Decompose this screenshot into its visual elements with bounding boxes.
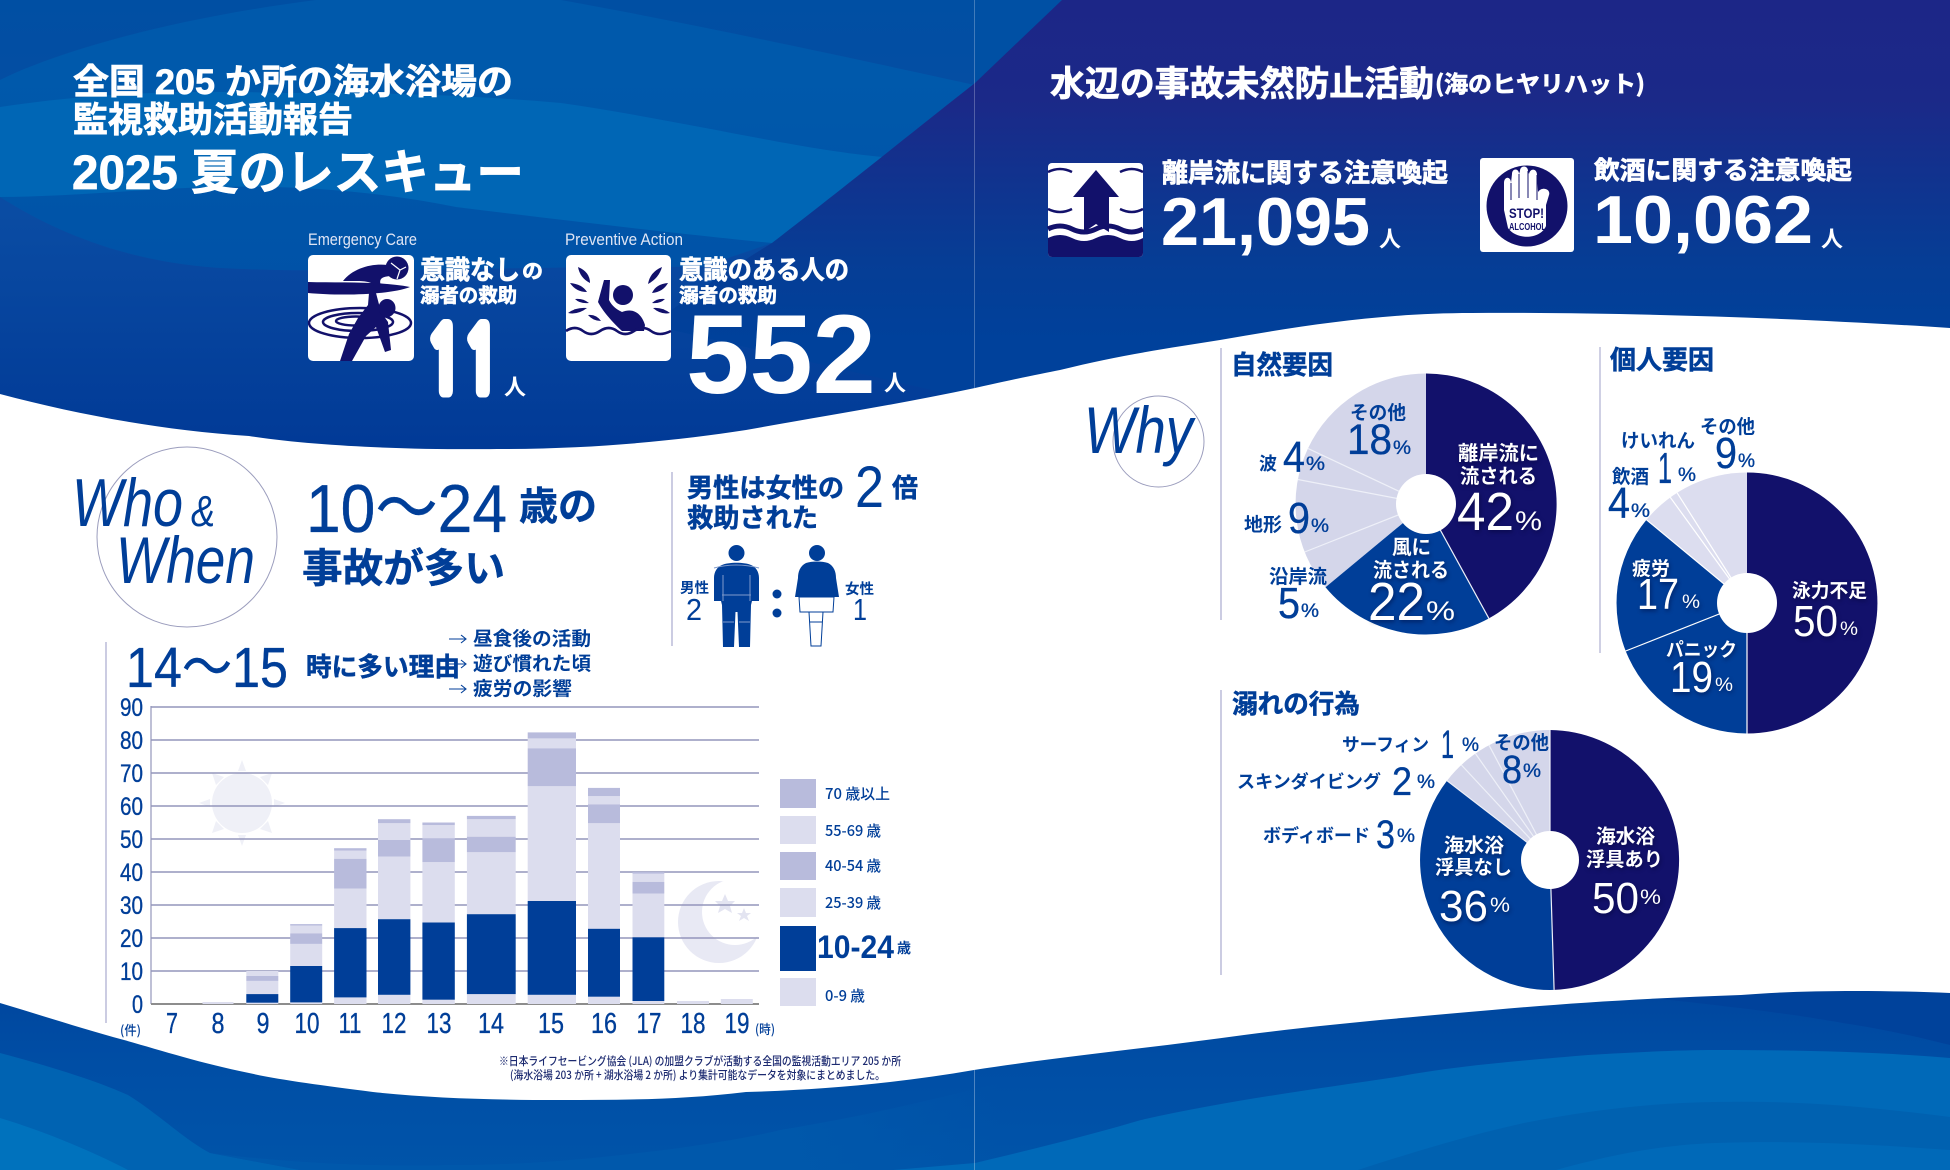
icon: moon	[678, 879, 768, 963]
gender ratio panel	[672, 455, 918, 647]
heading: 2	[855, 455, 884, 520]
y axis labels: 50	[120, 826, 143, 854]
labels outer: 9	[1715, 429, 1737, 478]
x axis labels: 16	[591, 1008, 617, 1040]
labels inner: %	[1640, 886, 1661, 909]
number: 11: 11	[426, 318, 500, 406]
labels outer: %	[1393, 438, 1411, 459]
y axis labels: 70	[120, 760, 143, 788]
heading	[687, 455, 918, 535]
heading: 14-15 reasons: 遊び慣れた頃	[473, 649, 591, 676]
icon: stop alcohol: ALCOHOL	[1509, 222, 1546, 233]
label: 溺者の救助	[420, 279, 517, 308]
footnote	[499, 1053, 901, 1083]
x axis labels: 19	[724, 1008, 750, 1040]
ratio colon	[772, 590, 782, 618]
labels outer: 1	[1441, 723, 1454, 767]
heading: 男性は女性の	[687, 468, 844, 505]
labels inner	[1632, 554, 1867, 702]
labels outer: サーフィン	[1342, 731, 1429, 757]
y axis labels: 10	[120, 958, 143, 986]
stat: emergency care: Emergency Care	[308, 230, 417, 249]
x axis labels: 8	[212, 1008, 224, 1040]
text: 人	[1821, 222, 1843, 254]
number: 552: 552	[686, 292, 876, 417]
labels outer: 飲酒	[1612, 462, 1649, 489]
text	[1161, 153, 1448, 260]
labels inner: %	[1426, 596, 1455, 626]
footnote: ※日本ライフセービング協会 (JLA) の加盟クラブが活動する全国の監視活動エリア 205 か所	[499, 1053, 901, 1069]
x axis labels: 7	[166, 1008, 178, 1040]
labels inner	[1368, 437, 1542, 632]
labels outer: スキンダイビング	[1237, 768, 1381, 794]
labels outer: その他	[1700, 412, 1755, 439]
labels inner: %	[1840, 619, 1858, 640]
icon: rescuer with surfboard	[308, 255, 414, 361]
labels inner: パニック	[1666, 635, 1737, 662]
heading: age group: 事故が多い	[302, 536, 505, 594]
chart legend: 歳	[897, 938, 911, 958]
x axis labels: 17	[636, 1008, 662, 1040]
labels inner: 50	[1793, 597, 1838, 646]
icon: woman	[795, 545, 839, 646]
labels outer: %	[1631, 501, 1650, 522]
number: 552: 人	[884, 366, 906, 398]
label: 溺者の救助	[679, 279, 777, 308]
y axis labels: 60	[120, 793, 143, 821]
heading: prevention: (海のヒヤリハット)	[1435, 65, 1645, 99]
number: 11: 人	[504, 370, 526, 402]
badge: Why: Why	[1084, 393, 1196, 467]
title: 全国 205 か所の海水浴場の	[73, 63, 513, 102]
labels inner: 離岸流に	[1458, 437, 1539, 466]
labels outer: 波	[1259, 450, 1277, 476]
stacked bar chart	[120, 694, 775, 1040]
ratio labels: 男性	[680, 577, 709, 598]
pie chart	[1617, 472, 1877, 734]
labels outer: 3	[1376, 813, 1395, 857]
labels outer: 沿岸流	[1269, 562, 1327, 589]
labels inner: 17	[1637, 570, 1679, 619]
chart legend: 70 歳以上	[825, 783, 890, 804]
labels outer: 8	[1502, 748, 1522, 792]
labels inner: %	[1490, 894, 1510, 917]
ratio labels	[680, 577, 874, 627]
y axis labels: 0	[132, 991, 143, 1019]
text: 10,062	[1593, 182, 1813, 258]
x axis labels: 10	[294, 1008, 320, 1040]
icon: stop alcohol: STOP!	[1509, 205, 1544, 221]
label: 意識なし	[420, 250, 520, 287]
labels inner: 22	[1368, 572, 1425, 632]
labels outer: その他	[1494, 728, 1549, 755]
text: 人	[1379, 222, 1401, 254]
labels inner: 流される	[1373, 554, 1449, 583]
labels inner: 浮具あり	[1586, 843, 1663, 872]
labels inner: 42	[1457, 482, 1514, 542]
labels outer: その他	[1350, 398, 1406, 425]
labels outer: %	[1523, 761, 1541, 782]
labels outer: 9	[1288, 494, 1310, 543]
labels outer: 18	[1347, 416, 1392, 464]
heading: 自然要因	[1231, 345, 1333, 382]
chart legend	[780, 779, 911, 1006]
labels outer: %	[1397, 826, 1415, 847]
stat: preventive action	[565, 230, 906, 417]
heading: 救助された	[687, 498, 818, 535]
heading: 個人要因	[1610, 340, 1714, 377]
y axis labels: 30	[120, 892, 143, 920]
labels inner: %	[1515, 506, 1542, 536]
heading: 14-15 reasons: 時に多い理由	[306, 647, 460, 684]
labels inner: 泳力不足	[1792, 576, 1867, 603]
ratio labels: 1	[853, 592, 867, 627]
x axis labels: 12	[382, 1008, 406, 1040]
labels inner: 疲労	[1632, 554, 1670, 581]
heading: age group: 歳の	[519, 476, 597, 532]
pie chart	[1420, 730, 1679, 990]
pie chart	[1296, 373, 1557, 635]
labels inner: 海水浴	[1444, 829, 1504, 858]
labels outer: 4	[1608, 479, 1630, 528]
labels outer	[1608, 412, 1755, 528]
heading: age group: 10〜24	[306, 471, 507, 547]
footnote: (海水浴場 203 か所 + 湖水浴場 2 か所) より集計可能なデータを対象にまとめました。	[510, 1067, 885, 1083]
heading: prevention	[1050, 56, 1645, 107]
y axis labels	[120, 694, 143, 1019]
heading: 倍	[892, 468, 918, 505]
labels outer: 地形	[1244, 510, 1282, 537]
heading: 14-15 reasons	[126, 624, 591, 701]
ratio labels: 女性	[845, 578, 874, 599]
x axis labels: 9	[256, 1008, 270, 1040]
label: 意識のある人の	[679, 250, 849, 287]
badge: Who & When: Who	[72, 465, 183, 541]
stat: emergency care	[308, 230, 543, 406]
x axis labels: 18	[680, 1008, 706, 1040]
badge: Who & When: &	[191, 487, 215, 536]
labels inner: 50	[1592, 874, 1639, 923]
chart legend: 0-9 歳	[825, 985, 865, 1006]
label: の	[522, 255, 543, 284]
chart legend: 55-69 歳	[825, 820, 881, 841]
grid lines	[151, 706, 759, 1004]
labels outer: 1	[1658, 444, 1672, 493]
stat: preventive action: Preventive Action	[565, 230, 683, 249]
labels inner: %	[1715, 675, 1733, 696]
text	[1593, 151, 1852, 258]
heading: 14-15 reasons: 14〜15	[126, 636, 288, 700]
axis units: (件)	[120, 1020, 141, 1039]
labels outer: %	[1417, 772, 1435, 793]
labels outer: %	[1678, 465, 1696, 486]
x axis labels	[166, 1008, 750, 1040]
heading: prevention: 水辺の事故未然防止活動	[1050, 56, 1434, 107]
x axis labels: 11	[338, 1008, 362, 1040]
icon: stop alcohol	[1480, 158, 1574, 252]
labels outer: ボディボード	[1263, 822, 1370, 848]
heading: 溺れの行為	[1232, 684, 1360, 721]
labels outer: %	[1311, 516, 1329, 537]
panel: personal factors	[1600, 340, 1877, 734]
labels outer	[1237, 723, 1549, 857]
axis units: (時)	[755, 1019, 775, 1038]
labels outer: %	[1306, 454, 1325, 475]
title	[72, 63, 524, 200]
icon: swimmer in water	[566, 255, 671, 361]
panel: natural factors	[1221, 345, 1557, 635]
labels outer	[1244, 398, 1411, 628]
text: 飲酒に関する注意喚起	[1594, 151, 1852, 187]
heading: age group	[302, 471, 597, 594]
text: 離岸流に関する注意喚起	[1162, 153, 1448, 190]
icon: man	[714, 545, 759, 647]
labels inner: 風に	[1392, 531, 1431, 560]
labels inner: 36	[1439, 882, 1488, 931]
chart legend: 25-39 歳	[825, 892, 881, 913]
ratio labels: 2	[686, 592, 702, 627]
x axis labels: 15	[538, 1008, 564, 1040]
axis units	[120, 1019, 775, 1039]
icon: sun	[199, 760, 285, 846]
x axis labels: 13	[426, 1008, 452, 1040]
bars	[202, 732, 753, 1004]
labels outer: 2	[1392, 760, 1412, 804]
y axis labels: 80	[120, 727, 143, 755]
labels outer: 5	[1278, 579, 1300, 628]
title: 監視救助活動報告	[73, 101, 353, 140]
stat: rip current warnings	[1048, 153, 1448, 260]
labels outer: %	[1301, 601, 1319, 622]
badge: Who & When	[72, 447, 277, 627]
y axis labels: 90	[120, 694, 143, 722]
labels inner: 19	[1670, 653, 1713, 702]
labels inner: 海水浴	[1596, 820, 1655, 849]
labels inner: 浮具なし	[1435, 851, 1512, 880]
icon: arrow in waves	[1048, 163, 1143, 257]
labels outer: けいれん	[1621, 426, 1695, 453]
panel: drowning activity	[1221, 684, 1679, 990]
badge: Who & When: When	[116, 523, 255, 597]
title: 2025 夏のレスキュー	[72, 147, 524, 200]
labels outer: %	[1738, 451, 1755, 472]
stat: alcohol warnings	[1480, 151, 1852, 258]
y axis labels: 20	[120, 925, 143, 953]
y axis labels: 40	[120, 859, 143, 887]
label	[679, 250, 849, 308]
x axis labels: 14	[478, 1008, 504, 1040]
labels outer: 4	[1283, 433, 1305, 482]
chart legend: 10-24	[817, 929, 894, 965]
text: 21,095	[1161, 184, 1370, 260]
labels inner: 流される	[1460, 460, 1537, 489]
chart legend: 40-54 歳	[825, 855, 881, 876]
labels inner	[1435, 820, 1663, 931]
labels outer: %	[1462, 735, 1479, 756]
heading: 14-15 reasons: 疲労の影響	[473, 674, 572, 701]
labels inner: %	[1682, 592, 1700, 613]
heading: 14-15 reasons: 昼食後の活動	[473, 624, 591, 651]
label	[420, 250, 543, 308]
